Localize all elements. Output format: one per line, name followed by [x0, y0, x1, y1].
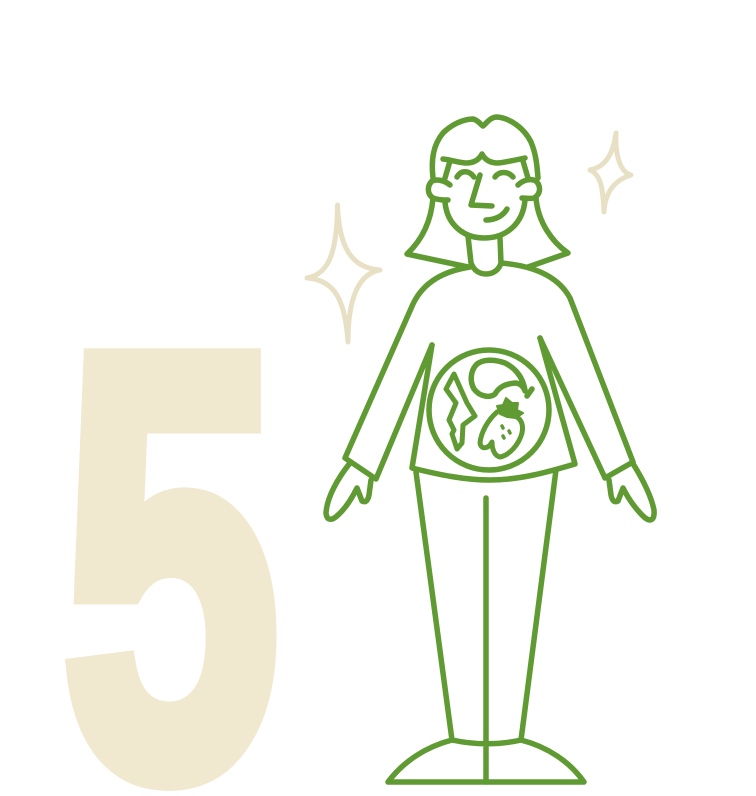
smile — [486, 209, 507, 220]
eyes — [457, 172, 513, 177]
bangs — [443, 154, 528, 178]
woman figure — [326, 117, 654, 782]
shoulders and sleeves — [345, 263, 633, 479]
face — [445, 200, 525, 238]
shoes — [388, 740, 584, 782]
strawberry seeds — [502, 426, 510, 438]
hair — [407, 117, 568, 267]
sparkle: large — [307, 205, 380, 342]
neck — [468, 236, 501, 274]
trousers — [416, 470, 556, 782]
stomach organ — [471, 360, 532, 396]
ears — [428, 180, 540, 200]
nose — [471, 175, 492, 206]
stomach circle — [429, 350, 549, 470]
shirt — [412, 338, 575, 480]
strawberry — [480, 412, 523, 457]
hands — [326, 462, 654, 520]
sparkle: small — [590, 133, 631, 212]
carrot — [446, 374, 475, 449]
strawberry leaves — [497, 398, 523, 418]
